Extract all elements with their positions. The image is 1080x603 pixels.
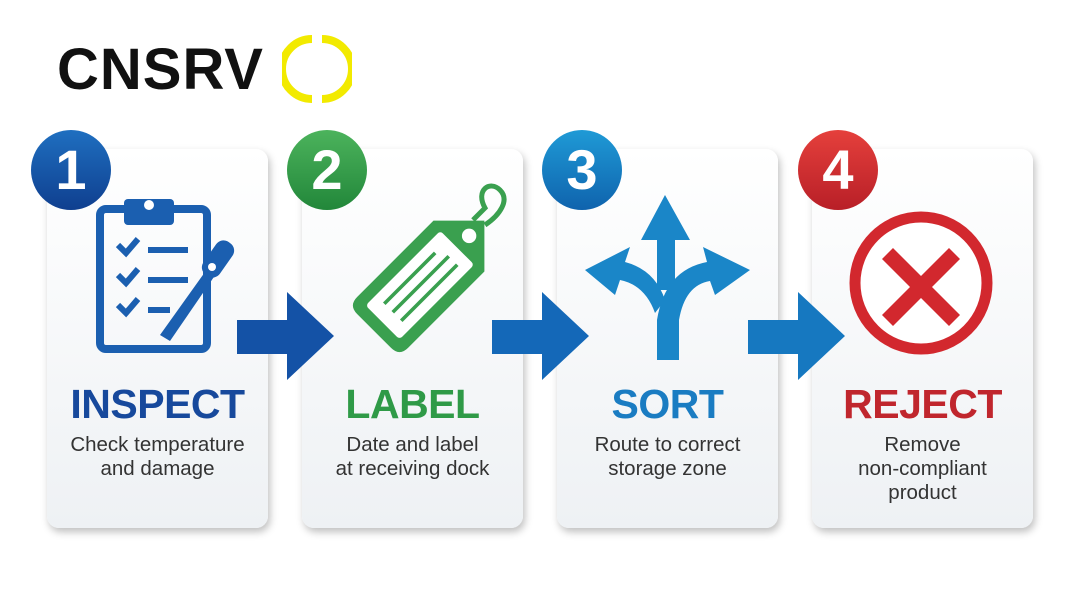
text: reject: product — [888, 481, 957, 504]
text: sort — [595, 433, 740, 480]
badge 2: 2 — [311, 138, 343, 201]
badge 3 — [542, 130, 622, 210]
panel: label — [302, 149, 523, 528]
icon: sort arrows — [585, 195, 750, 360]
badge 4: 4 — [822, 138, 854, 201]
panel: reject — [812, 149, 1033, 528]
text: label: Date and label — [346, 433, 479, 456]
panel: inspect — [47, 149, 268, 528]
title: reject: REJECT — [843, 381, 1002, 427]
badge 2 — [287, 130, 367, 210]
text: reject: non-compliant — [858, 457, 987, 480]
arrow 3 — [748, 292, 845, 380]
arrow 1 — [237, 292, 334, 380]
text: reject: Remove — [884, 433, 961, 456]
badge 1: 1 — [55, 138, 87, 201]
panel: sort — [557, 149, 778, 528]
logo: CNSRV — [57, 37, 264, 102]
badge 1 — [31, 130, 111, 210]
text: sort: Route to correct — [595, 433, 740, 456]
text: sort: storage zone — [608, 457, 727, 480]
text: inspect: Check temperature — [70, 433, 245, 456]
title: inspect: INSPECT — [70, 381, 245, 427]
logo — [57, 35, 352, 103]
icon: logo ring — [282, 35, 352, 103]
text: inspect — [70, 433, 245, 480]
text: label: at receiving dock — [336, 457, 489, 480]
title: sort: SORT — [612, 381, 723, 427]
arrow 2 — [492, 292, 589, 380]
badge 3: 3 — [566, 138, 598, 201]
text: reject — [858, 433, 987, 504]
title: label: LABEL — [345, 381, 480, 427]
text: label — [336, 433, 490, 480]
icon: tag — [352, 184, 507, 352]
icon: clipboard — [96, 199, 234, 353]
badge 4 — [798, 130, 878, 210]
text: inspect: and damage — [100, 457, 214, 480]
icon: reject — [850, 212, 992, 354]
